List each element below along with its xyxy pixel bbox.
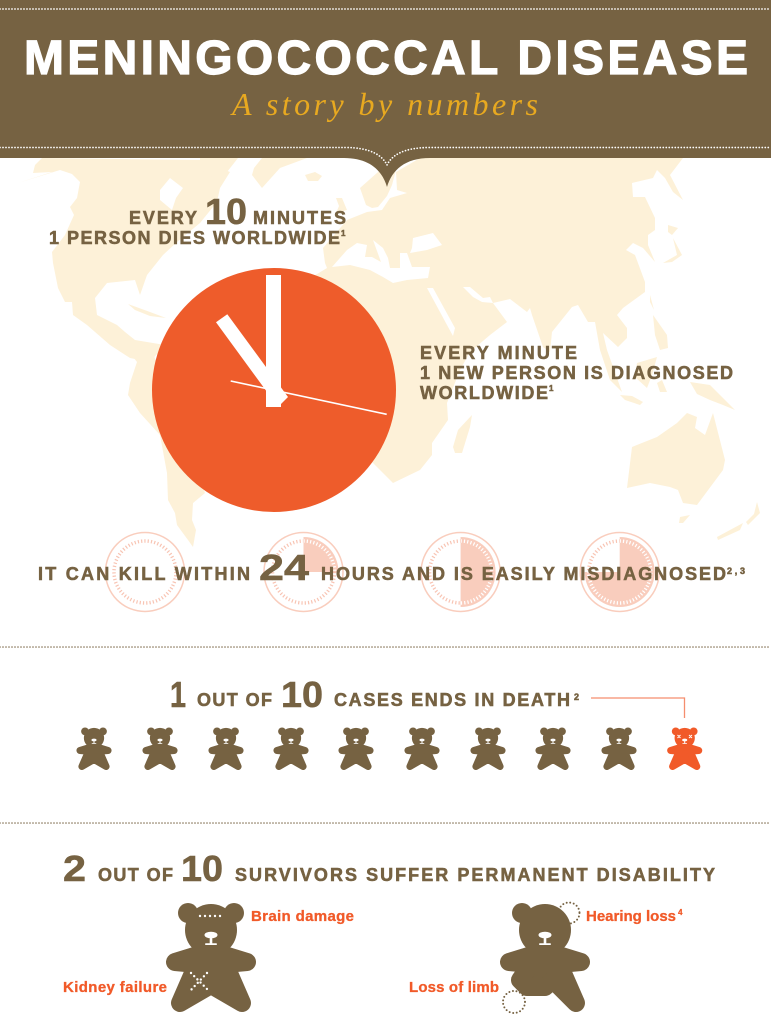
map: Australia bbox=[627, 413, 725, 505]
map: New Guinea bbox=[690, 382, 735, 410]
brain dots bbox=[200, 915, 223, 917]
stat: every minute bbox=[420, 343, 733, 403]
heading: 2 out of 10 bbox=[63, 848, 715, 889]
second hand bbox=[231, 381, 387, 414]
minute hand bbox=[266, 275, 281, 407]
map: Hudson Bay bbox=[160, 178, 183, 210]
heading: 1 out of 10: CASES ENDS IN DEATH bbox=[334, 690, 570, 710]
stat: every 10 minutes: EVERY bbox=[129, 208, 197, 228]
heading: 2 out of 10: 10 bbox=[181, 848, 223, 889]
label: brain damage: Brain damage bbox=[251, 908, 354, 925]
header banner bbox=[0, 0, 771, 187]
kidney cross bbox=[191, 973, 208, 990]
bear: hearing loss and loss of limb bbox=[503, 902, 581, 1013]
stat: every minute: 1 bbox=[549, 384, 554, 393]
heading: 2 out of 10: OUT OF bbox=[98, 865, 173, 885]
stat: every 10 minutes: 1 PERSON DIES WORLDWIDE bbox=[49, 228, 340, 248]
map: Philippines bbox=[650, 295, 668, 350]
map: Cuba bbox=[128, 304, 166, 318]
map: Scandinavia bbox=[360, 162, 396, 208]
map: New Zealand bbox=[717, 502, 760, 540]
map: Japan bbox=[663, 225, 682, 263]
heading: 2 out of 10: SURVIVORS SUFFER PERMANENT DISABILITY bbox=[235, 865, 715, 885]
stat: can kill within 24 hours: IT CAN KILL WITHIN bbox=[38, 564, 250, 584]
stat: every 10 minutes: 10 bbox=[205, 191, 247, 232]
stat: every 10 minutes bbox=[49, 191, 346, 248]
stat: can kill within 24 hours bbox=[38, 547, 745, 588]
world map background bbox=[18, 158, 760, 547]
label: kidney failure: Kidney failure bbox=[63, 979, 167, 996]
map: Sulawesi bbox=[657, 380, 667, 392]
map: South America bbox=[128, 345, 205, 547]
stat: every 10 minutes: 1 bbox=[341, 229, 346, 238]
map: Greenland bbox=[252, 158, 307, 188]
subtitle: A story by numbers bbox=[230, 86, 538, 122]
stat: can kill within 24 hours: 24 bbox=[259, 547, 309, 588]
label: loss of limb: Loss of limb bbox=[409, 979, 499, 996]
heading: 1 out of 10: 1 bbox=[170, 674, 186, 715]
map: North America bbox=[18, 158, 230, 362]
map: Madagascar bbox=[453, 415, 472, 453]
stat: can kill within 24 hours: HOURS AND IS EASILY MISDIAGNOSED bbox=[321, 564, 726, 584]
map: Iceland bbox=[305, 172, 322, 181]
map: United Kingdom bbox=[336, 198, 347, 213]
stat: every 10 minutes: MINUTES bbox=[253, 208, 346, 228]
map: Baffin Island bbox=[200, 158, 238, 178]
dial: 18 hours bbox=[580, 532, 659, 612]
map: Mediterranean and seas bbox=[332, 233, 493, 336]
heading: 1 out of 10: OUT OF bbox=[197, 690, 272, 710]
orange bear bbox=[671, 727, 699, 766]
dotted outline: missing foot bbox=[503, 991, 525, 1013]
bear: brain damage and kidney failure bbox=[175, 903, 247, 1003]
stat: can kill within 24 hours: 2,3 bbox=[727, 566, 745, 576]
map: Sumatra and Java bbox=[620, 395, 643, 405]
clock bbox=[152, 268, 396, 512]
map: Eurasia and Africa bbox=[300, 158, 683, 483]
map: Borneo bbox=[635, 357, 657, 388]
label: hearing loss: 4 bbox=[678, 908, 683, 917]
label: hearing loss: Hearing loss bbox=[586, 908, 676, 925]
callout line to orange bear bbox=[591, 698, 684, 718]
row of ten bears bbox=[80, 727, 699, 766]
dial: 12 hours bbox=[421, 532, 500, 612]
map: Tasmania bbox=[679, 515, 690, 523]
heading: 1 out of 10: 2 bbox=[574, 692, 579, 702]
heading: 1 out of 10: 10 bbox=[281, 674, 323, 715]
stat: every minute: WORLDWIDE bbox=[420, 383, 548, 403]
hour hand bbox=[216, 314, 288, 407]
title: MENINGOCOCCAL DISEASE bbox=[24, 32, 748, 85]
stat: every minute: 1 NEW PERSON IS DIAGNOSED bbox=[420, 363, 733, 383]
stat: every minute: EVERY MINUTE bbox=[420, 343, 577, 363]
heading: 2 out of 10: 2 bbox=[63, 848, 86, 889]
dial: 6 hours bbox=[264, 532, 343, 612]
dotted outline: missing ear bbox=[558, 902, 580, 924]
dial: 0 hours bbox=[106, 532, 184, 612]
heading: 1 out of 10 bbox=[170, 674, 579, 715]
